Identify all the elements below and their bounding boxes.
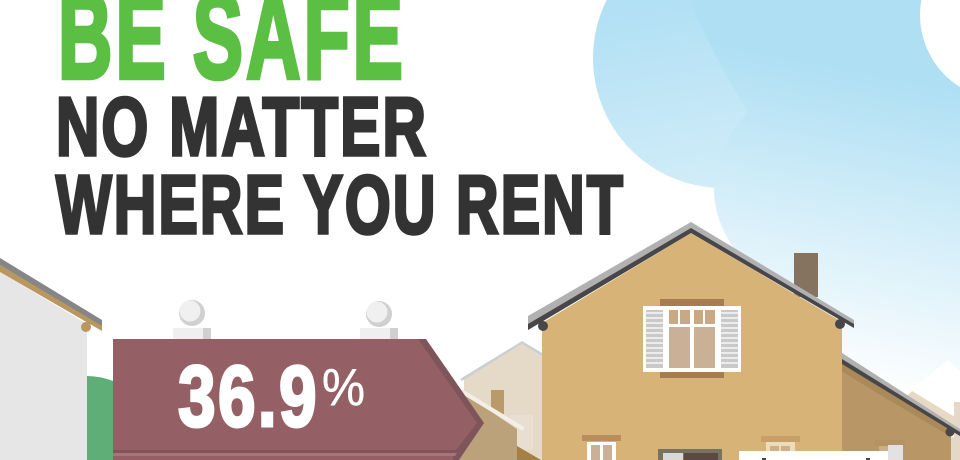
wing roof <box>842 353 960 436</box>
statistic: 36.9 <box>178 349 319 445</box>
green bush <box>87 376 113 460</box>
small tan house <box>456 389 541 460</box>
upper window <box>643 299 741 378</box>
percent sign: % <box>322 359 365 417</box>
white fence <box>739 445 903 460</box>
main house <box>528 222 854 460</box>
lower middle window <box>761 436 800 460</box>
title line: no matter: NO MATTER <box>56 80 428 173</box>
wing window <box>875 440 905 460</box>
chimney <box>794 253 818 297</box>
post cap right <box>360 301 398 339</box>
main roof <box>528 222 854 330</box>
title line: where you rent: WHERE YOU RENT <box>56 158 625 251</box>
title <box>56 0 625 251</box>
left house <box>0 258 102 460</box>
door <box>658 449 722 460</box>
post cap left <box>173 300 211 339</box>
right wing of house <box>842 353 960 460</box>
lower left window <box>582 435 621 460</box>
background beige house <box>460 341 542 460</box>
sky cloud <box>593 0 960 400</box>
sign: maroon arrow <box>113 339 484 460</box>
right background house <box>905 360 960 460</box>
